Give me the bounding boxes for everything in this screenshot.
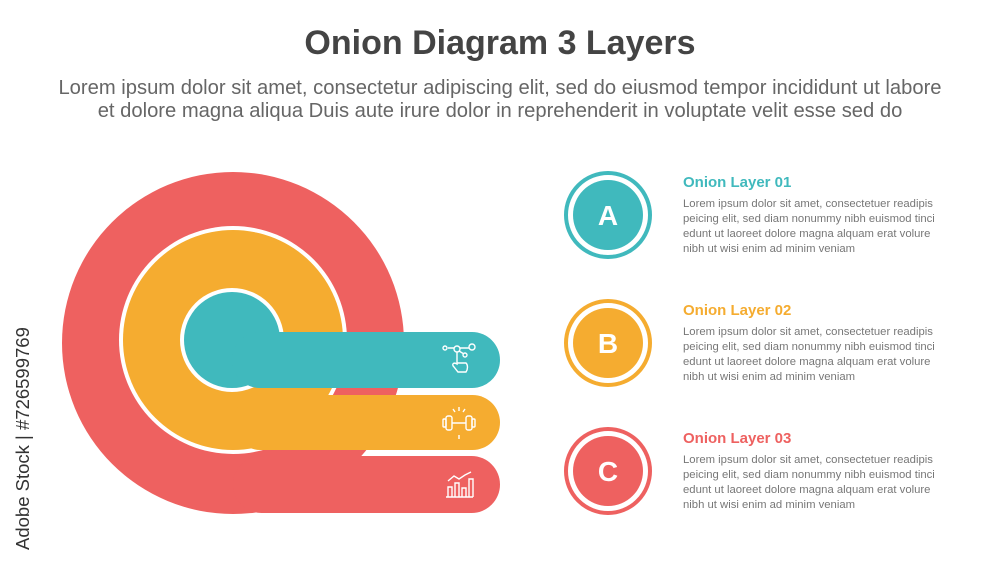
watermark side text: Adobe Stock | #726599769 [12, 327, 33, 550]
layer 02 heading: Onion Layer 02 [683, 302, 791, 319]
title: Onion Diagram 3 Layers [304, 24, 696, 62]
circle A: A [598, 200, 618, 231]
circle B: B [598, 328, 618, 359]
layer 2 orange [119, 226, 500, 454]
layer 3 red [62, 172, 500, 514]
circle A [566, 173, 650, 257]
layer 01 text: Lorem ipsum dolor sit amet, consectetuer readipis peicing elit, sed diam nonummy nibh euismod tinci edunt ut laoreet dolore magna alquam erat volure nibh ut wisi enim ad minim veniam [683, 198, 935, 255]
layer 03 heading: Onion Layer 03 [683, 430, 791, 447]
layer 1 teal [180, 288, 500, 392]
circle C: C [598, 456, 618, 487]
layer 02 text: Lorem ipsum dolor sit amet, consectetuer readipis peicing elit, sed diam nonummy nibh euismod tinci edunt ut laoreet dolore magna alquam erat volure nibh ut wisi enim ad minim veniam [683, 326, 935, 383]
subtitle: Lorem ipsum dolor sit amet, consectetur adipiscing elit, sed do eiusmod tempor incididunt ut labore [58, 77, 942, 99]
icon: touch network [443, 344, 475, 372]
icon: bar chart [446, 472, 473, 497]
layer 01 heading: Onion Layer 01 [683, 174, 791, 191]
layer 03 text: Lorem ipsum dolor sit amet, consectetuer readipis peicing elit, sed diam nonummy nibh euismod tinci edunt ut laoreet dolore magna alquam erat volure nibh ut wisi enim ad minim veniam [683, 454, 935, 511]
subtitle: et dolore magna aliqua Duis aute irure dolor in reprehenderit in voluptate velit esse sed do [98, 100, 902, 122]
subtitle [58, 77, 942, 122]
circle C [566, 429, 650, 513]
circle B [566, 301, 650, 385]
icon: dumbbell [443, 407, 475, 439]
